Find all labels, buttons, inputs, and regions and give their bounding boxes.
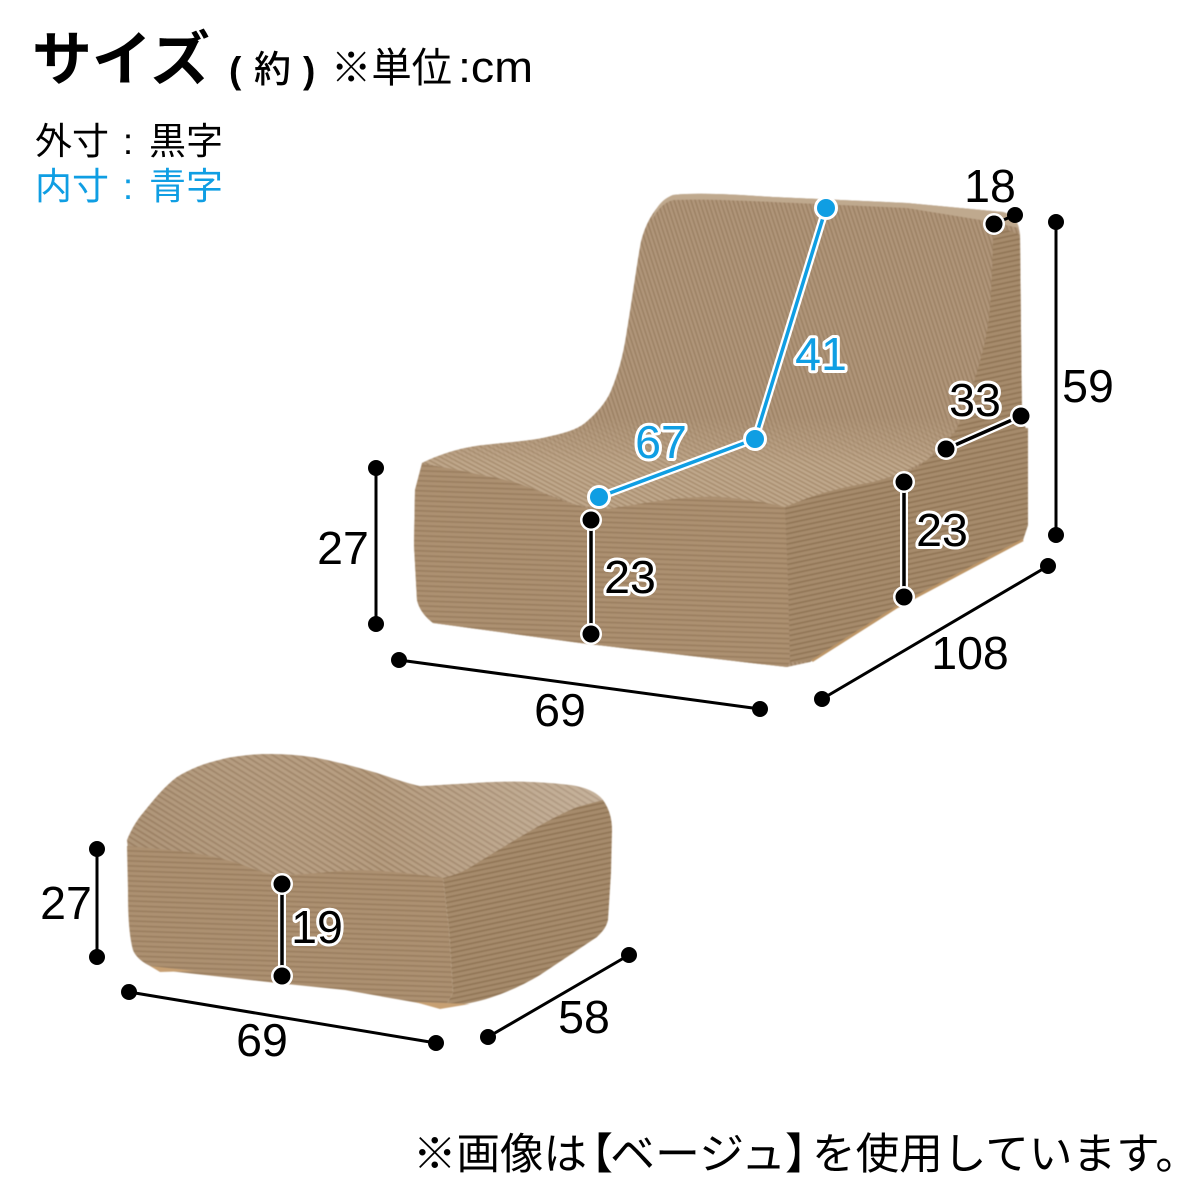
- ottoman illustration: [127, 754, 612, 1009]
- dimension: sofa depth 108: [814, 558, 1056, 707]
- dimension: sofa height 59: [1048, 214, 1114, 543]
- dimension: sofa height 59: 59: [1062, 360, 1114, 412]
- dimension: inner seat depth 67 (blue): 67: [635, 416, 687, 468]
- dimension: side seat height 23: [896, 474, 968, 606]
- sofa right side face: [785, 428, 1028, 662]
- legend: outer dimension black text: 外寸: [35, 121, 109, 162]
- legend: outer dimension black text: :: [123, 121, 133, 162]
- dimension: inner back 41 (blue): 41: [795, 328, 847, 380]
- title: [32, 27, 533, 93]
- legend: inner dimension blue text: [35, 166, 223, 207]
- footnote: [413, 1131, 1199, 1179]
- dimension: inner back 41 (blue): [755, 199, 847, 439]
- dimension: sofa front height 27: 27: [317, 522, 369, 574]
- legend: inner dimension blue text: :: [123, 166, 133, 207]
- ottoman front face: [127, 846, 453, 1007]
- dimension: ottoman width 69: [121, 984, 444, 1066]
- sofa front face: [414, 464, 790, 667]
- footnote: 【: [570, 1131, 613, 1179]
- title: ): [303, 50, 315, 91]
- dimension: side width 33: [938, 374, 1030, 458]
- dimension: sofa front height 27: [317, 460, 384, 632]
- footnote: ※画像は: [413, 1131, 587, 1179]
- legend: inner dimension blue text: 内寸: [35, 166, 109, 207]
- dimension: ottoman height 19: 19: [291, 901, 343, 953]
- footnote: を使用しています。: [812, 1131, 1199, 1179]
- sofa seat surface: [423, 426, 955, 509]
- legend: inner dimension blue text: 青字: [149, 166, 223, 207]
- dimension: side width 33: 33: [949, 374, 1001, 426]
- title: (: [229, 50, 242, 91]
- title: :cm: [458, 43, 533, 92]
- ottoman top surface: [127, 754, 603, 880]
- dimension: side seat height 23: 23: [916, 504, 968, 556]
- dimension: sofa width 69: [391, 652, 768, 736]
- dimension: sofa back thickness 18: [964, 160, 1023, 232]
- dimension: sofa back thickness 18: 18: [964, 160, 1016, 212]
- sofa top edge highlight: [652, 194, 1019, 228]
- title: 約: [254, 49, 291, 90]
- dimension: ottoman width 69: 69: [236, 1014, 288, 1066]
- dimension: sofa width 69: 69: [534, 684, 586, 736]
- dimension: ottoman depth 58: [480, 947, 637, 1045]
- sofa illustration: [414, 194, 1028, 667]
- title: サイズ: [32, 27, 210, 93]
- dimension: ottoman height 27: [40, 841, 105, 965]
- footnote: 】: [785, 1131, 828, 1179]
- dimension: inner seat depth 67 (blue): [590, 416, 764, 506]
- dimension: sofa depth 108: 108: [931, 627, 1009, 679]
- ottoman base edge: [150, 966, 470, 1009]
- dimension: ottoman height 19: [274, 876, 343, 984]
- ottoman right side face: [443, 800, 612, 1007]
- dimension: ottoman height 27: 27: [40, 877, 92, 929]
- dimension: front seat height 23: [582, 512, 656, 642]
- dimension: front seat height 23: 23: [604, 551, 656, 603]
- sofa backrest: [414, 194, 1028, 667]
- sofa side of backrest: [955, 224, 1028, 433]
- title: ※単位: [331, 45, 452, 91]
- sofa base edge: [812, 540, 1023, 661]
- legend: outer dimension black text: [35, 121, 223, 162]
- legend: outer dimension black text: 黒字: [149, 121, 223, 162]
- footnote: ベージュ: [610, 1131, 786, 1179]
- dimension: ottoman depth 58: 58: [558, 991, 610, 1043]
